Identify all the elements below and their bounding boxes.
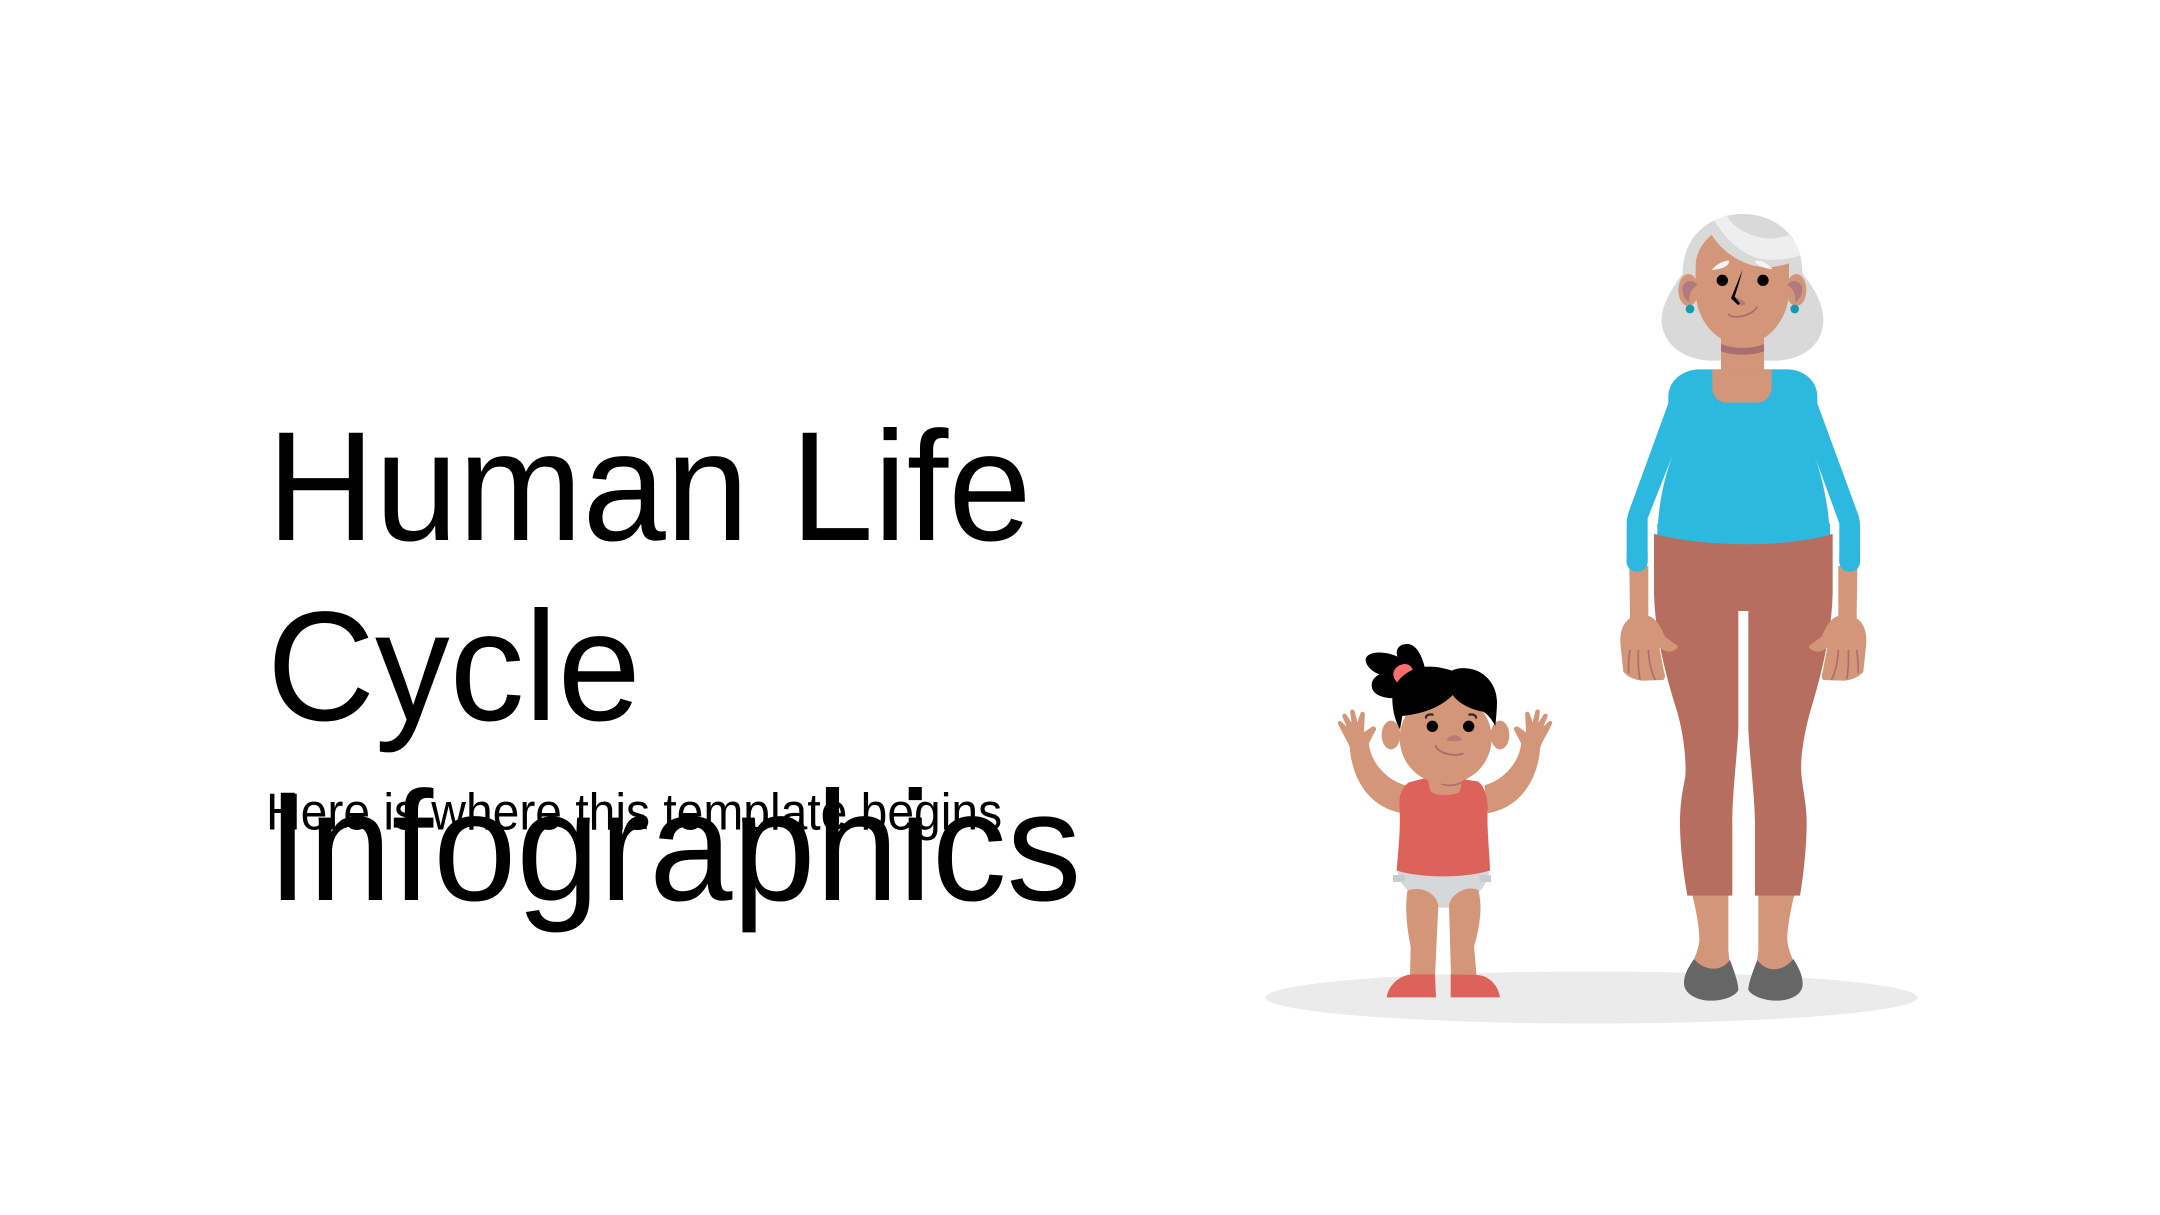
mouth <box>1436 746 1463 755</box>
eyes <box>1427 721 1474 732</box>
shoes <box>1684 959 1803 1001</box>
chest <box>1427 773 1463 795</box>
head <box>1400 693 1492 784</box>
earrings <box>1686 305 1799 313</box>
title: Human Life <box>267 400 1031 574</box>
dress <box>1397 778 1490 876</box>
nose <box>1731 270 1745 305</box>
shoes <box>1387 974 1500 997</box>
title <box>267 400 1081 934</box>
sleeve cuffs <box>1627 553 1860 572</box>
right arm and hand <box>1485 710 1552 813</box>
illustration: child <box>1338 644 1552 997</box>
illustration: grandmother <box>1620 214 1866 1001</box>
ears <box>1382 721 1509 749</box>
eyebrows <box>1426 714 1476 718</box>
title: Cycle <box>267 580 641 754</box>
hair bun <box>1366 644 1425 698</box>
eyebrows <box>1712 261 1773 270</box>
face <box>1696 235 1789 345</box>
neck shadow <box>1721 344 1764 355</box>
hair band highlight <box>1714 215 1801 260</box>
subtitle: Here is where this template begins <box>266 783 1002 841</box>
sweater <box>1627 369 1860 570</box>
right arm and hand <box>1809 566 1866 681</box>
diaper <box>1393 872 1491 908</box>
legs <box>1692 893 1795 970</box>
ears <box>1678 274 1806 306</box>
hair back <box>1662 214 1823 361</box>
hair <box>1392 667 1497 729</box>
left arm and hand <box>1620 566 1678 681</box>
trousers <box>1654 534 1833 896</box>
mouth <box>1729 307 1757 317</box>
legs <box>1406 889 1480 977</box>
neck <box>1721 337 1764 373</box>
neck shadow <box>1437 780 1465 786</box>
left arm and hand <box>1338 710 1405 813</box>
collar <box>1712 369 1772 403</box>
hair tie <box>1393 664 1413 683</box>
grandmother lower body <box>1620 523 1866 1001</box>
ground shadow <box>1266 972 1918 1024</box>
grandmother upper body <box>1627 214 1860 570</box>
nose <box>1447 735 1462 741</box>
eyes <box>1717 275 1769 286</box>
title: Infographics <box>267 760 1081 934</box>
sweater hem over trousers <box>1657 523 1830 544</box>
